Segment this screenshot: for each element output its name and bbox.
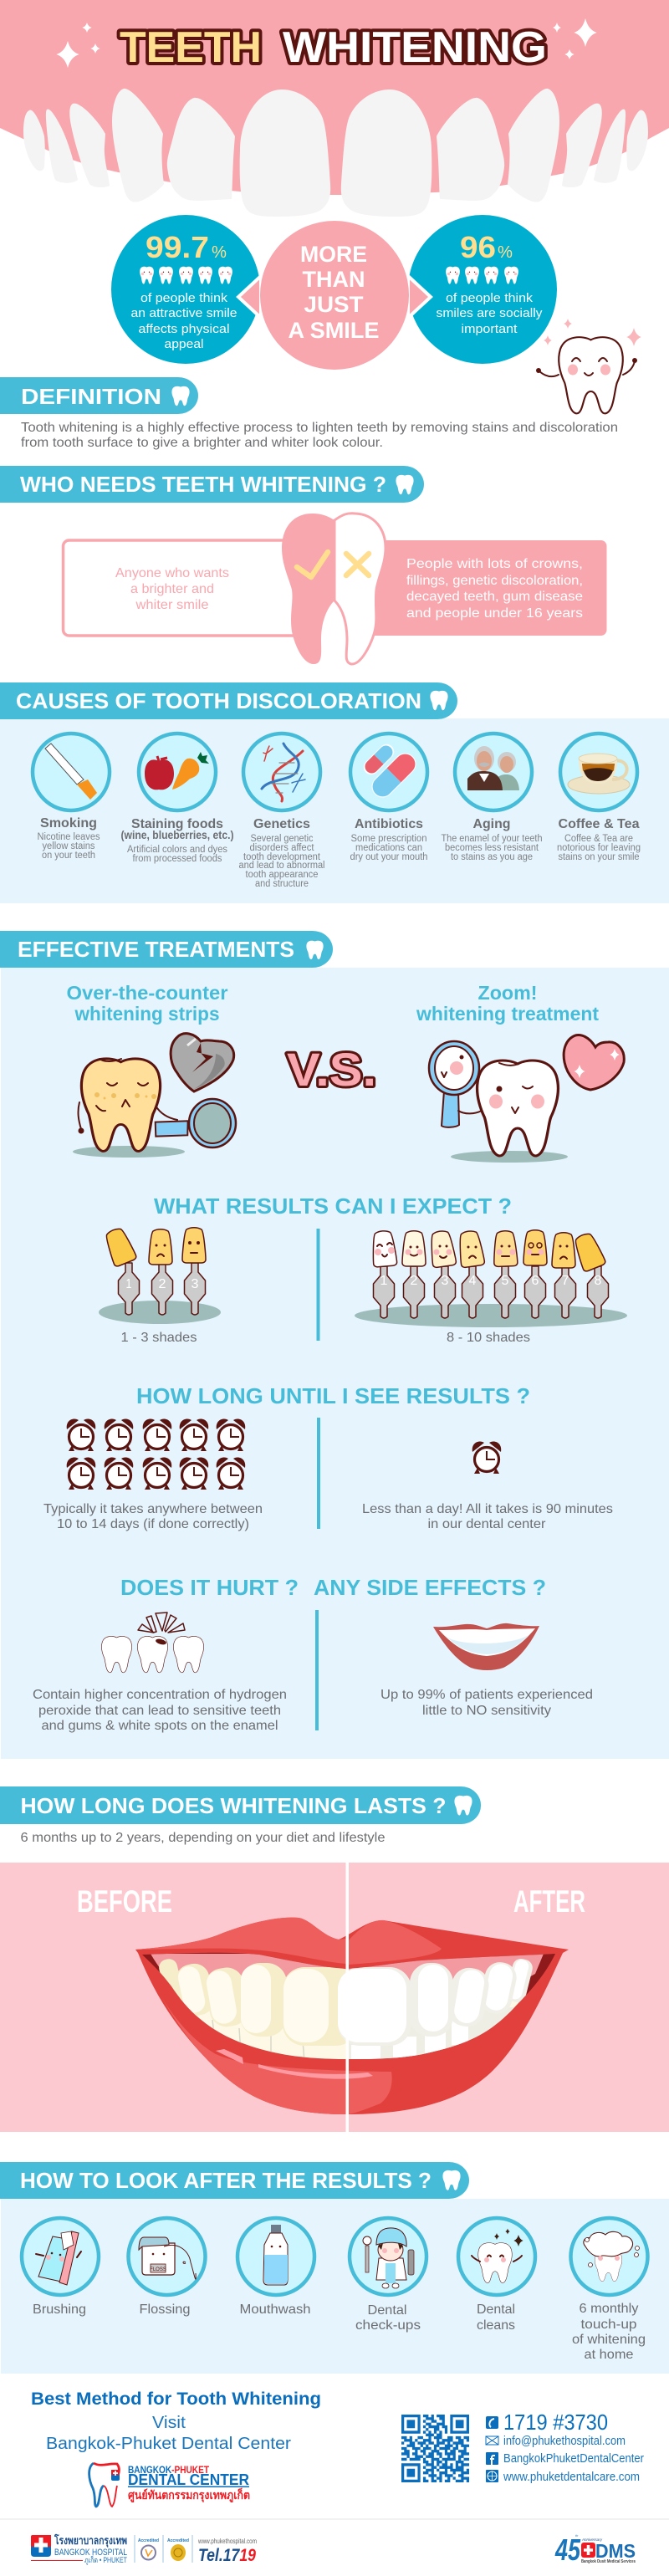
footer: call to action: Bangkok-Phuket Dental Center — [46, 2435, 291, 2453]
care: brushing: Brushing — [33, 2303, 86, 2317]
stat circles — [111, 215, 557, 370]
shade guide: zoom: 5 — [502, 1274, 509, 1288]
text: zoom time — [362, 1502, 613, 1531]
panel: before and after — [0, 1863, 669, 2132]
cause: smoking: on your teeth — [42, 851, 95, 861]
heading: how long until: HOW LONG UNTIL I SEE RESULTS ? — [136, 1383, 530, 1408]
text: zoom side effects — [380, 1688, 593, 1718]
text: strips time: 10 to 14 days (if done correctly) — [57, 1517, 249, 1531]
box: not suitable: fillings, genetic discoloration, — [406, 574, 583, 588]
column titles: whitening strips — [74, 1003, 220, 1025]
accreditation badges: Accredited — [138, 2538, 159, 2543]
care: flossing — [129, 2218, 206, 2317]
cause: smoking: Nicotine leaves — [37, 832, 100, 842]
care: mouthwash — [237, 2218, 314, 2317]
care: six monthly touch-up: 6 monthly — [579, 2302, 639, 2316]
heading: causes: CAUSES OF TOOTH DISCOLORATION — [16, 688, 421, 713]
cause: genetics: Several genetic — [251, 834, 314, 844]
logo: Bangkok-Phuket Dental Center: ศูนย์ทันตกรรมกรุงเทพภูเก็ต — [128, 2487, 250, 2502]
heading: definition: DEFINITION — [21, 384, 161, 409]
cause: genetics — [239, 733, 324, 889]
shade guide: zoom: 6 — [532, 1274, 539, 1288]
contact details — [486, 2410, 644, 2484]
shade guide: zoom: 2 — [411, 1274, 418, 1288]
heading: effective treatments — [0, 931, 333, 968]
care: six monthly touch-up: touch-up — [580, 2318, 637, 2332]
panel: who needs teeth whitening — [64, 514, 607, 664]
icon: happy tooth mascot — [536, 319, 641, 413]
text: zoom side effects: little to NO sensitivity — [422, 1704, 551, 1718]
shade guide: zoom: 8 — [595, 1274, 602, 1288]
care: six monthly touch-up: at home — [584, 2348, 634, 2362]
box: not suitable — [368, 540, 607, 636]
heading: what results: WHAT RESULTS CAN I EXPECT ? — [154, 1193, 512, 1219]
logo: Bangkok-Phuket Dental Center: BANGKOK-PHUKET — [128, 2464, 210, 2476]
panel background: treatments — [1, 968, 669, 1759]
box: candidates: Anyone who wants — [115, 566, 229, 580]
care: flossing: FLOSS — [150, 2267, 166, 2272]
box: not suitable: and people under 16 years — [406, 606, 583, 621]
stat: 99.7 percent: % — [212, 243, 227, 262]
heading: does it hurt: DOES IT HURT ? — [120, 1575, 299, 1600]
text: zoom time: in our dental center — [428, 1517, 546, 1531]
cause: smoking — [33, 733, 110, 861]
sparkles — [56, 18, 597, 68]
stat: 99.7 percent: appeal — [164, 337, 204, 351]
stat: 99.7 percent: affects physical — [139, 322, 229, 336]
footer: call to action: Best Method for Tooth Whitening — [31, 2389, 321, 2409]
accreditation badges: Accredited — [167, 2538, 189, 2543]
cause: coffee and tea: stains on your smile — [559, 852, 639, 862]
heading: how long lasts: HOW LONG DOES WHITENING LASTS ? — [20, 1793, 447, 1818]
divider — [315, 1610, 319, 1730]
column titles — [67, 982, 599, 1025]
caption: 1-3 shades: 1 - 3 shades — [120, 1331, 197, 1345]
column titles: Over-the-counter — [67, 982, 228, 1004]
shade guide: zoom: 3 — [442, 1274, 449, 1288]
hospital tel — [197, 2538, 257, 2565]
stat: 96 percent — [408, 215, 557, 364]
shade guide: strips — [99, 1226, 221, 1324]
illustration: lips and teeth — [134, 1918, 569, 2114]
text: definition: Tooth whitening is a highly effective process to lighten teeth by removing stains and discoloration — [21, 421, 618, 435]
logo: BDMS 45th anniversary: Anniversary — [581, 2538, 603, 2542]
cause: smoking: yellow stains — [42, 841, 95, 851]
care: flossing: Flossing — [139, 2303, 191, 2317]
cause: aging: Aging — [473, 817, 510, 831]
website: www.phuketdentalcare.com — [503, 2470, 640, 2484]
text: strips side effects: and gums & white spots on the enamel — [42, 1719, 278, 1733]
text: strips side effects — [33, 1688, 287, 1733]
text: duration: 6 months up to 2 years, depending on your diet and lifestyle — [20, 1831, 386, 1845]
text: strips side effects: Contain higher concentration of hydrogen — [33, 1688, 287, 1702]
logo: BDMS 45th anniversary: DMS — [595, 2540, 636, 2562]
care: dental check-ups: check-ups — [355, 2318, 421, 2333]
center circle: more than just a smile — [238, 221, 431, 370]
cause: aging — [442, 733, 542, 862]
text: strips time — [43, 1502, 263, 1531]
shade guide: strips: 2 — [159, 1277, 166, 1291]
text: strips time: Typically it takes anywhere between — [43, 1502, 263, 1516]
shade guide: zoom — [355, 1229, 627, 1327]
cause: aging: becomes less resistant — [445, 843, 539, 853]
cause: coffee and tea: Coffee & Tea — [559, 817, 640, 831]
center circle: more than just a smile: MORE — [300, 242, 367, 267]
heading: how long lasts — [0, 1786, 481, 1824]
footer divider — [0, 2518, 669, 2520]
care: brushing — [22, 2218, 99, 2317]
icon: sad yellow tooth with broken heart — [73, 1034, 236, 1158]
title: TEETH — [120, 23, 262, 72]
title: WHITENING — [283, 23, 547, 72]
footer: call to action: Visit — [152, 2414, 186, 2432]
hospital tel: www.phukethospital.com — [197, 2538, 257, 2545]
title — [120, 23, 547, 72]
facebook: BangkokPhuketDentalCenter — [503, 2451, 644, 2466]
box: candidates: whiter smile — [135, 598, 209, 612]
cause: genetics: tooth appearance — [246, 870, 318, 880]
box: candidates: a brighter and — [130, 582, 214, 596]
email: info@phukethospital.com — [503, 2434, 626, 2448]
icon: split tooth — [282, 514, 386, 664]
heading: how to look after: HOW TO LOOK AFTER THE RESULTS ? — [20, 2168, 432, 2193]
logo: BDMS 45th anniversary: th — [575, 2533, 579, 2538]
icon: single clock — [472, 1441, 501, 1474]
cause: antibiotics: Antibiotics — [355, 817, 423, 831]
care: mouthwash: Mouthwash — [239, 2303, 311, 2317]
label: before: BEFORE — [77, 1884, 172, 1919]
text: V.S.: V.S. — [287, 1043, 376, 1096]
stat: 96 percent: smiles are socially — [437, 306, 543, 320]
cause: genetics: and lead to abnormal — [239, 861, 324, 871]
logo: Bangkok Hospital: BANGKOK HOSPITAL — [54, 2548, 127, 2558]
heading: effective treatments: EFFECTIVE TREATMENTS — [18, 937, 294, 962]
cause: aging: The enamel of your teeth — [442, 834, 542, 844]
stat: 99.7 percent — [111, 215, 260, 364]
heading: how to look after — [0, 2162, 469, 2199]
phone: 1719 #3730 — [503, 2410, 608, 2435]
heading: causes — [0, 682, 457, 719]
divider — [317, 1418, 320, 1529]
icon: ten clocks — [67, 1418, 245, 1490]
stat: 96 percent: % — [498, 243, 513, 262]
box: candidates — [64, 540, 306, 636]
heading: definition — [0, 377, 198, 414]
text: zoom time: Less than a day! All it takes is 90 minutes — [362, 1502, 613, 1516]
center circle: more than just a smile: THAN — [303, 267, 365, 292]
hospital tel: Tel.1719 — [198, 2546, 256, 2565]
care: six monthly touch-up: of whitening — [572, 2333, 646, 2347]
cause: staining foods: (wine, blueberries, etc.) — [120, 829, 234, 841]
column titles: whitening treatment — [416, 1003, 599, 1025]
care: dental cleans — [458, 2218, 535, 2333]
shade guide: zoom: 1 — [380, 1274, 388, 1288]
heading: does it hurt — [120, 1575, 546, 1600]
logo: BDMS 45th anniversary: Bangkok Dusit Medical Services — [581, 2559, 636, 2564]
box: not suitable: People with lots of crowns, — [406, 557, 583, 571]
text: zoom side effects: Up to 99% of patients experienced — [380, 1688, 593, 1702]
heading: does it hurt: ANY SIDE EFFECTS ? — [314, 1575, 546, 1600]
cause: smoking: Smoking — [40, 816, 97, 831]
logo: Bangkok-Phuket Dental Center: DENTAL CENTER — [128, 2471, 249, 2488]
label: after: AFTER — [513, 1884, 585, 1919]
stat: 99.7 percent: of people think — [140, 291, 228, 305]
cause: genetics: Genetics — [253, 817, 310, 831]
logo: Bangkok Hospital: ภูเก็ต • PHUKET — [84, 2554, 127, 2565]
cause: antibiotics: medications can — [355, 843, 422, 853]
QR code — [401, 2416, 469, 2481]
shade guide: zoom: 7 — [562, 1274, 569, 1288]
cause: staining foods: from processed foods — [132, 854, 222, 864]
cause: coffee and tea: Coffee & Tea are — [564, 834, 633, 844]
cause: antibiotics: Some prescription — [351, 834, 426, 844]
cause: coffee and tea: notorious for leaving — [557, 843, 641, 853]
text: definition: from tooth surface to give a brighter and whiter look colour. — [21, 436, 383, 450]
footer: call to action — [31, 2389, 321, 2453]
icon: sensitive teeth — [101, 1613, 204, 1673]
icon: happy white tooth with heart and mirror — [429, 1035, 624, 1163]
caption: 8-10 shades: 8 - 10 shades — [447, 1331, 530, 1345]
cause: staining foods: Artificial colors and dyes — [127, 845, 227, 855]
divider — [316, 1229, 319, 1341]
care: dental check-ups — [350, 2218, 426, 2333]
column titles: Zoom! — [478, 982, 537, 1004]
panel background: care — [1, 2199, 669, 2374]
shade guide: zoom: 4 — [469, 1274, 477, 1288]
box: not suitable: decayed teeth, gum disease — [406, 590, 583, 604]
center circle: more than just a smile: JUST — [304, 292, 364, 317]
heading: who needs: WHO NEEDS TEETH WHITENING ? — [20, 472, 386, 497]
shade guide: strips: 1 — [125, 1277, 132, 1291]
logo: BDMS 45th anniversary: 45 — [554, 2533, 581, 2567]
header gum band — [0, 0, 669, 195]
panel background: causes — [0, 718, 669, 903]
teeth illustration — [23, 89, 648, 217]
logo: BDMS 45th anniversary — [554, 2533, 636, 2567]
cause: genetics: tooth development — [243, 852, 321, 862]
cause: antibiotics — [350, 733, 428, 862]
cause: aging: to stains as you age — [451, 852, 533, 862]
text: definition — [21, 421, 618, 450]
cause: staining foods: Staining foods — [131, 817, 223, 831]
stat: 96 percent: 96 — [460, 230, 496, 264]
care: six monthly touch-up — [570, 2218, 647, 2362]
stat: 96 percent: of people think — [446, 291, 534, 305]
icon: smile — [433, 1623, 539, 1670]
accreditation badges — [135, 2535, 192, 2563]
care: dental cleans: Dental — [477, 2303, 515, 2317]
care: dental cleans: cleans — [477, 2318, 515, 2333]
shade guide: strips: 3 — [191, 1277, 199, 1291]
logo: Bangkok-Phuket Dental Center — [89, 2463, 250, 2507]
center circle: more than just a smile: A SMILE — [288, 318, 380, 343]
stat: 99.7 percent: an attractive smile — [130, 306, 237, 320]
heading: who needs — [0, 466, 424, 503]
cause: staining foods — [120, 733, 234, 864]
stat: 96 percent: important — [462, 322, 518, 336]
cause: antibiotics: dry out your mouth — [350, 852, 428, 862]
cause: genetics: and structure — [255, 879, 309, 889]
logo: Bangkok Hospital: โรงพยาบาลกรุงเทพ — [54, 2533, 127, 2548]
cause: coffee and tea — [557, 733, 641, 862]
stat: 99.7 percent: 99.7 — [146, 230, 209, 264]
cause: genetics: disorders affect — [249, 843, 314, 853]
text: strips side effects: peroxide that can lead to sensitive teeth — [38, 1704, 281, 1718]
care: dental check-ups: Dental — [368, 2303, 406, 2318]
logo: Bangkok Hospital — [31, 2533, 127, 2565]
